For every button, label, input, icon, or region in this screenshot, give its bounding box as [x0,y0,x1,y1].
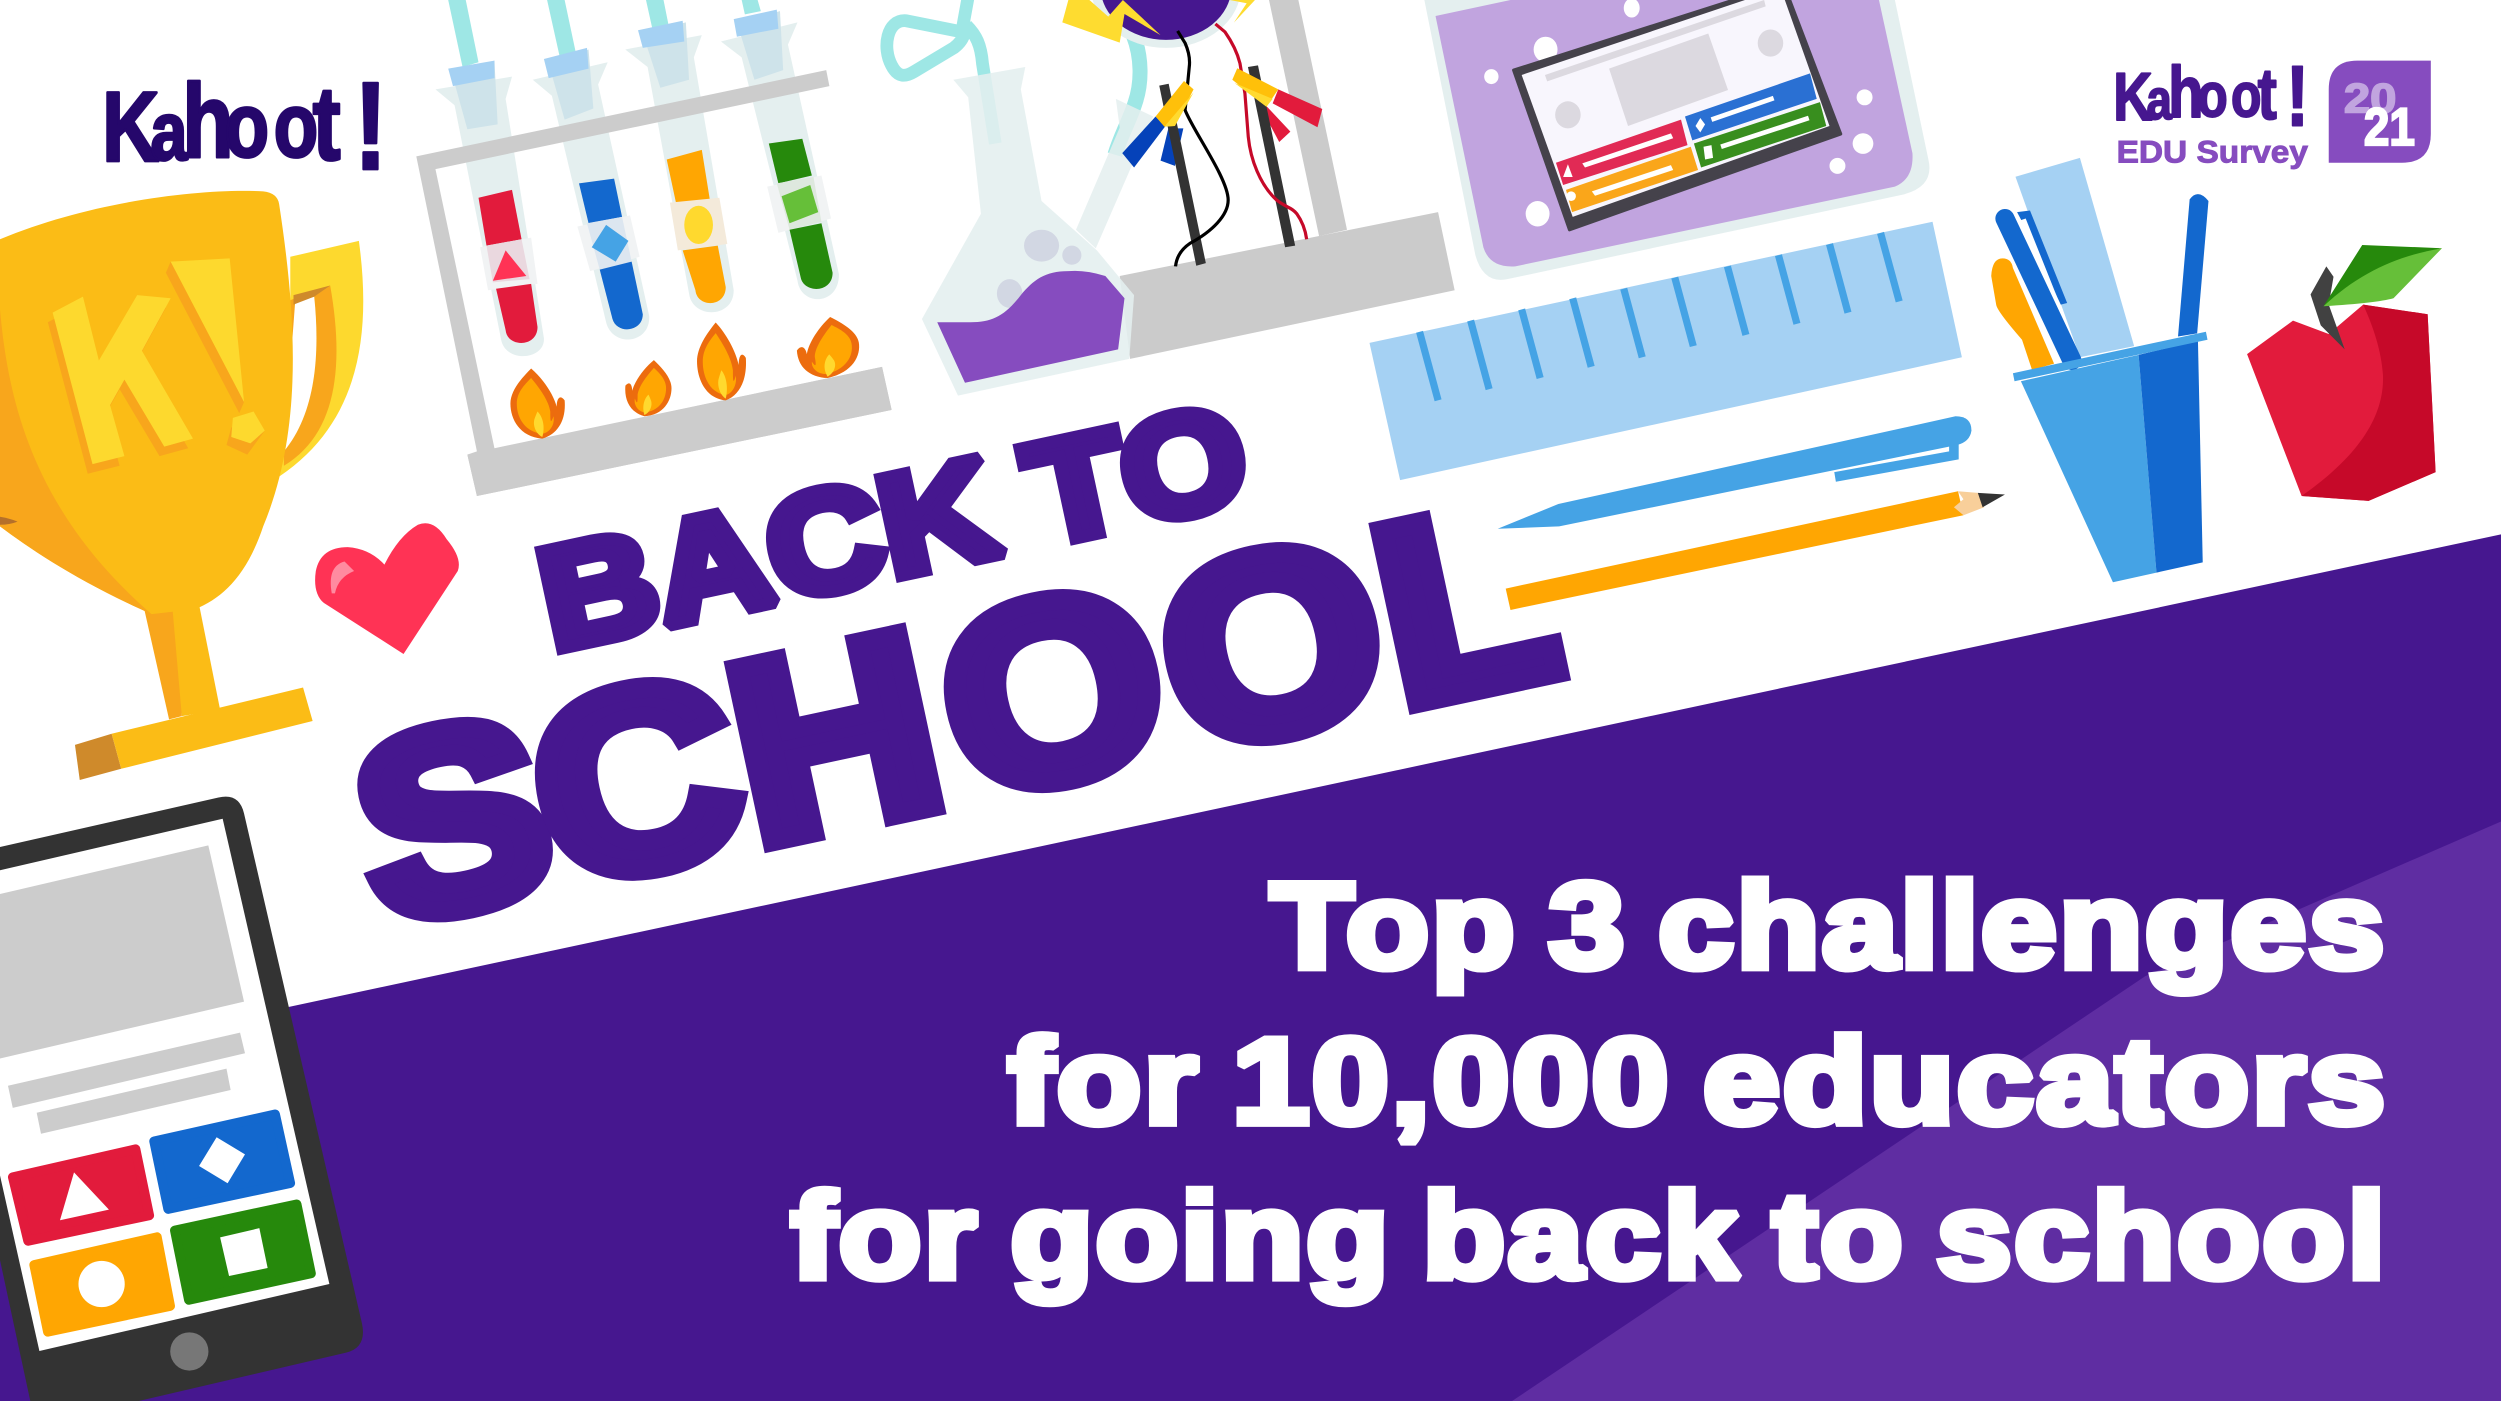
icon: phone [0,797,363,1401]
text block: main statement: Top 3 challenges [1270,857,2387,993]
text block: main statement [791,857,2388,1304]
icon: flame 1 [510,368,565,439]
icon: pencil cup [1991,158,2208,582]
ruler ticks [1420,233,1899,400]
phone answer: orange circle [34,1237,170,1332]
icon: flame 4 [792,313,864,383]
icon: test tube green [721,0,839,299]
icon: pen [1498,416,1971,529]
rack frame [416,70,892,496]
icon: trophy [0,191,363,780]
icon: flame 2 [625,360,672,416]
icon: Kahoot EDU Survey logo right [2113,49,2309,170]
tablet screen [1514,0,1841,230]
chart: test tube rack [416,0,892,496]
icon: Kahoot EDU Survey logo right: a [2147,67,2172,131]
icon: Kahoot EDU Survey logo right: t [2258,54,2277,134]
icon: heart [315,523,459,654]
icon: Kahoot logo left: o [274,75,318,176]
icon: 2021 badge: 20 [2344,74,2397,121]
icon: Kahoot EDU Survey logo right: K [2113,59,2152,135]
icon: ruler [1369,222,1962,480]
icon: purple tablet quiz [1424,0,1929,280]
heading: BACK TO: BACK TO [525,374,1261,681]
tablet white dots [1484,0,1873,226]
phone answer: red triangle [13,1149,149,1241]
heading: SCHOOL: SCHOOL [332,445,1578,978]
icon: 2021 badge [2329,61,2431,163]
icon: Kahoot logo left: ! [354,56,387,196]
icon: test tube blue [533,0,649,340]
icon: Kahoot EDU Survey logo right: h [2168,52,2204,133]
icon: Kahoot logo left: o [225,75,269,176]
icon: conical flask with tube [887,0,1153,396]
icon: science stand [1120,0,1455,359]
icon: Kahoot EDU Survey logo right: o [2231,60,2261,130]
icon: Kahoot logo left: K [102,72,159,182]
icon: Kahoot logo left: a [151,84,189,177]
icon: electric bulb, wires and clips [1062,0,1322,266]
phone answer: blue diamond [154,1114,290,1209]
icon: Kahoot logo left: t [313,66,341,183]
icon: Kahoot logo left: h [182,63,234,180]
icon: flame 3 [697,322,746,400]
panel: lighter purple corner [1512,821,2501,1401]
icon: Kahoot EDU Survey logo right: ! [2286,49,2309,144]
icon: 2021 badge: 21 [2364,98,2415,157]
icon: apple [2247,245,2442,501]
panel: purple diagonal background [0,534,2501,1401]
icon: test tube red [435,0,544,356]
phone home button [170,1332,208,1371]
text block: main statement: for 10,000 educators [1008,1013,2388,1149]
phone answer: green square [175,1204,311,1300]
text block: main statement: for going back to school [791,1168,2388,1304]
icon: pencil [1506,491,2005,610]
icon: test tube orange [625,0,734,312]
icon: Kahoot EDU Survey logo right: EDU Survey [2117,134,2308,170]
icon: Kahoot EDU Survey logo right: o [2197,60,2228,130]
